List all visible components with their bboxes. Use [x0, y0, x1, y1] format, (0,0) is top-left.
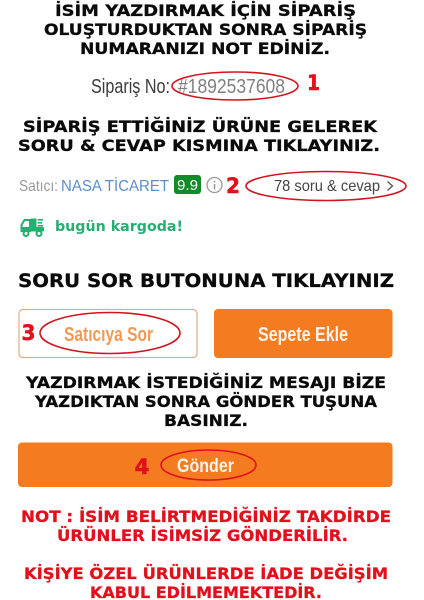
button: Gönder	[18, 442, 392, 487]
order number row: #1892537608	[178, 76, 285, 98]
seller score badge: 9.9	[177, 177, 198, 194]
warning: unnamed products: NOT : İSİM BELİRTMEDİĞİNİZ TAKDİRDE	[21, 507, 391, 526]
warning: no returns on personalised products	[24, 564, 388, 600]
seller row: 78 soru & cevap	[274, 178, 380, 195]
seller row: NASA TİCARET	[61, 176, 169, 195]
seller row: Satıcı:	[19, 178, 58, 195]
warning: unnamed products: ÜRÜNLER İSİMSİZ GÖNDERİLİR.	[57, 526, 348, 545]
heading: step 2 instructions	[18, 117, 380, 155]
heading: step 4 instructions: YAZDIRMAK İSTEDİĞİNİZ MESAJI BİZE	[25, 373, 386, 392]
seller row	[19, 172, 406, 200]
order number row: Sipariş No:	[91, 76, 170, 98]
warning: unnamed products	[21, 507, 391, 545]
heading: step 1 instructions	[44, 1, 367, 58]
heading: step 4 instructions: BASINIZ.	[164, 411, 248, 430]
button: Satıcıya Sor: Satıcıya Sor	[64, 324, 153, 346]
button: Satıcıya Sor: 3	[22, 321, 36, 345]
icon: truck	[21, 218, 44, 236]
seller score badge	[174, 175, 201, 194]
heading: step 1 instructions: İSİM YAZDIRMAK İÇİN SİPARİŞ	[55, 1, 356, 20]
seller row: 2	[226, 174, 240, 198]
heading: step 4 instructions	[25, 373, 386, 430]
heading: step 3 instructions: SORU SOR BUTONUNA TIKLAYINIZ	[18, 270, 394, 292]
order number row	[91, 71, 320, 100]
heading: step 1 instructions: OLUŞTURDUKTAN SONRA SİPARİŞ	[44, 20, 367, 39]
button: Sepete Ekle: Sepete Ekle	[258, 324, 348, 346]
heading: step 4 instructions: YAZDIKTAN SONRA GÖNDER TUŞUNA	[34, 392, 378, 411]
heading: step 2 instructions: SORU & CEVAP KISMINA TIKLAYINIZ.	[18, 136, 380, 155]
icon: info	[207, 178, 222, 192]
warning: no returns on personalised products: KİŞİYE ÖZEL ÜRÜNLERDE İADE DEĞİŞİM	[24, 564, 388, 583]
button: Satıcıya Sor	[19, 310, 197, 358]
heading: step 2 instructions: SİPARİŞ ETTİĞİNİZ ÜRÜNE GELEREK	[23, 117, 378, 136]
button: Sepete Ekle	[214, 309, 392, 358]
shipping row: bugün kargoda!	[55, 219, 183, 235]
button: Gönder: 4	[134, 455, 150, 479]
button: Gönder: Gönder	[177, 456, 235, 477]
heading: step 1 instructions: NUMARANIZI NOT EDİNİZ.	[80, 39, 330, 58]
order number row: 1	[307, 71, 320, 95]
